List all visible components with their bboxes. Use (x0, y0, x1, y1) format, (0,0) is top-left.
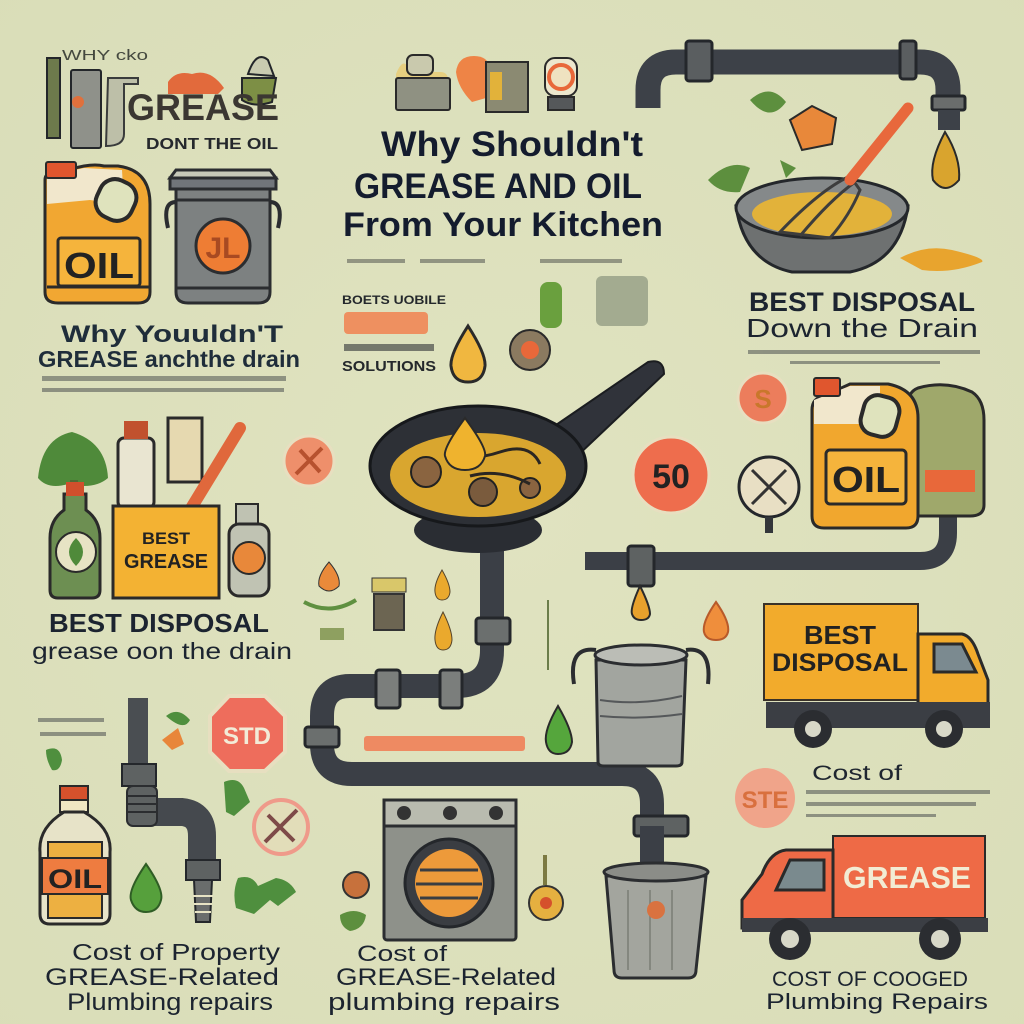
icon: box of disposal items (38, 418, 269, 598)
icon: metal pot (573, 645, 709, 766)
icons: leaves lower left (46, 712, 296, 914)
icon: oil bottle lower: OIL (48, 864, 102, 894)
small print under title (347, 259, 622, 263)
icons: row above title (396, 55, 577, 112)
heading: cost of: Cost of (812, 762, 902, 785)
heading: best disposal down the drain (746, 287, 978, 343)
heading: cost bottom left: Cost of Property (72, 939, 281, 965)
icon: stop sign (210, 696, 285, 771)
icon: box of disposal items: BEST (142, 529, 191, 548)
pipe network: top right (648, 41, 965, 130)
heading block: top left (47, 47, 279, 153)
icon: stop sign: STD (223, 723, 271, 750)
heading: best disposal down the drain: BEST DISPOSAL (749, 287, 975, 317)
right pipe (585, 515, 948, 620)
callout: solutions: BOETS UOBILE (342, 293, 446, 307)
heading block: top left: DONT THE OIL (146, 136, 278, 153)
icon: red truck: GREASE (843, 860, 971, 895)
icon: no sign top (738, 373, 788, 423)
callout: solutions: SOLUTIONS (342, 358, 436, 375)
heading: best disposal left (32, 608, 292, 664)
icon: lower left pipe (122, 698, 220, 922)
icons near solutions (510, 276, 648, 370)
small icons lower center (340, 855, 563, 931)
heading: cost bottom right: COST OF COOGED (772, 968, 968, 991)
icon: no-sign bottom left (254, 800, 308, 854)
small print right (748, 350, 980, 364)
heading: cost bottom right (766, 968, 988, 1014)
heading block: top left: WHY cko (62, 47, 148, 64)
heading: best disposal left: grease oon the drain (32, 638, 292, 664)
small center icons and drops (304, 562, 728, 754)
callout: solutions (342, 293, 446, 375)
title: GREASE AND OIL (354, 167, 642, 206)
icon: prohibition sign left (284, 436, 334, 486)
heading: cost bottom right: Plumbing Repairs (766, 989, 988, 1014)
pan with whisk top right (708, 91, 982, 272)
small print lower left (38, 718, 106, 736)
icon: green drop (131, 864, 161, 912)
icon: oil jugs right: OIL (832, 459, 900, 500)
heading block: top left: GREASE (127, 87, 279, 128)
heading: cost bottom center: GREASE-Related (336, 964, 556, 991)
title: Why Shouldn't (381, 125, 643, 164)
icon: yellow truck: BEST (804, 620, 876, 650)
heading: cost bottom left (45, 939, 281, 1016)
heading: cost bottom center: Cost of (357, 941, 448, 966)
icon: oil drop center (451, 326, 485, 382)
center small print (364, 736, 525, 751)
icon: 50 sign (633, 437, 709, 513)
heading: cost bottom left: Plumbing repairs (67, 989, 273, 1016)
icon: oil jug top left (45, 162, 150, 303)
icon: metal bucket top left (166, 170, 280, 303)
icon: bottom center bucket (604, 826, 708, 978)
heading: cost bottom center (328, 941, 560, 1016)
icon: metal bucket top left: JL (205, 232, 241, 265)
title: From Your Kitchen (343, 206, 663, 244)
heading: cost of (735, 762, 990, 828)
icon: 50 sign: 50 (652, 458, 690, 496)
heading: why you shouldn't: GREASE anchthe drain (38, 346, 300, 372)
main center pipe (305, 545, 688, 860)
icon: oil jugs right (812, 378, 984, 528)
heading: why you shouldn't (38, 321, 300, 372)
icon: gauge (739, 457, 799, 533)
icon: oil bottle lower (40, 786, 110, 924)
title (343, 125, 663, 244)
heading: cost bottom center: plumbing repairs (328, 989, 560, 1016)
heading: cost bottom left: GREASE-Related (45, 964, 279, 991)
icon: oven (384, 800, 516, 940)
icon: no sign top: S (754, 384, 772, 414)
icon: oil jug top left: OIL (64, 245, 134, 286)
icon: box of disposal items: GREASE (124, 551, 208, 573)
heading: best disposal left: BEST DISPOSAL (49, 608, 269, 638)
heading: cost of: STE (742, 787, 788, 814)
icon: yellow truck (764, 604, 990, 748)
icon: yellow truck: DISPOSAL (772, 649, 908, 677)
text block: small print (42, 376, 286, 392)
icon: red truck (742, 836, 988, 960)
frying pan center (370, 361, 664, 553)
heading: why you shouldn't: Why Youuldn'T (61, 321, 283, 348)
heading: best disposal down the drain: Down the Drain (746, 313, 978, 343)
